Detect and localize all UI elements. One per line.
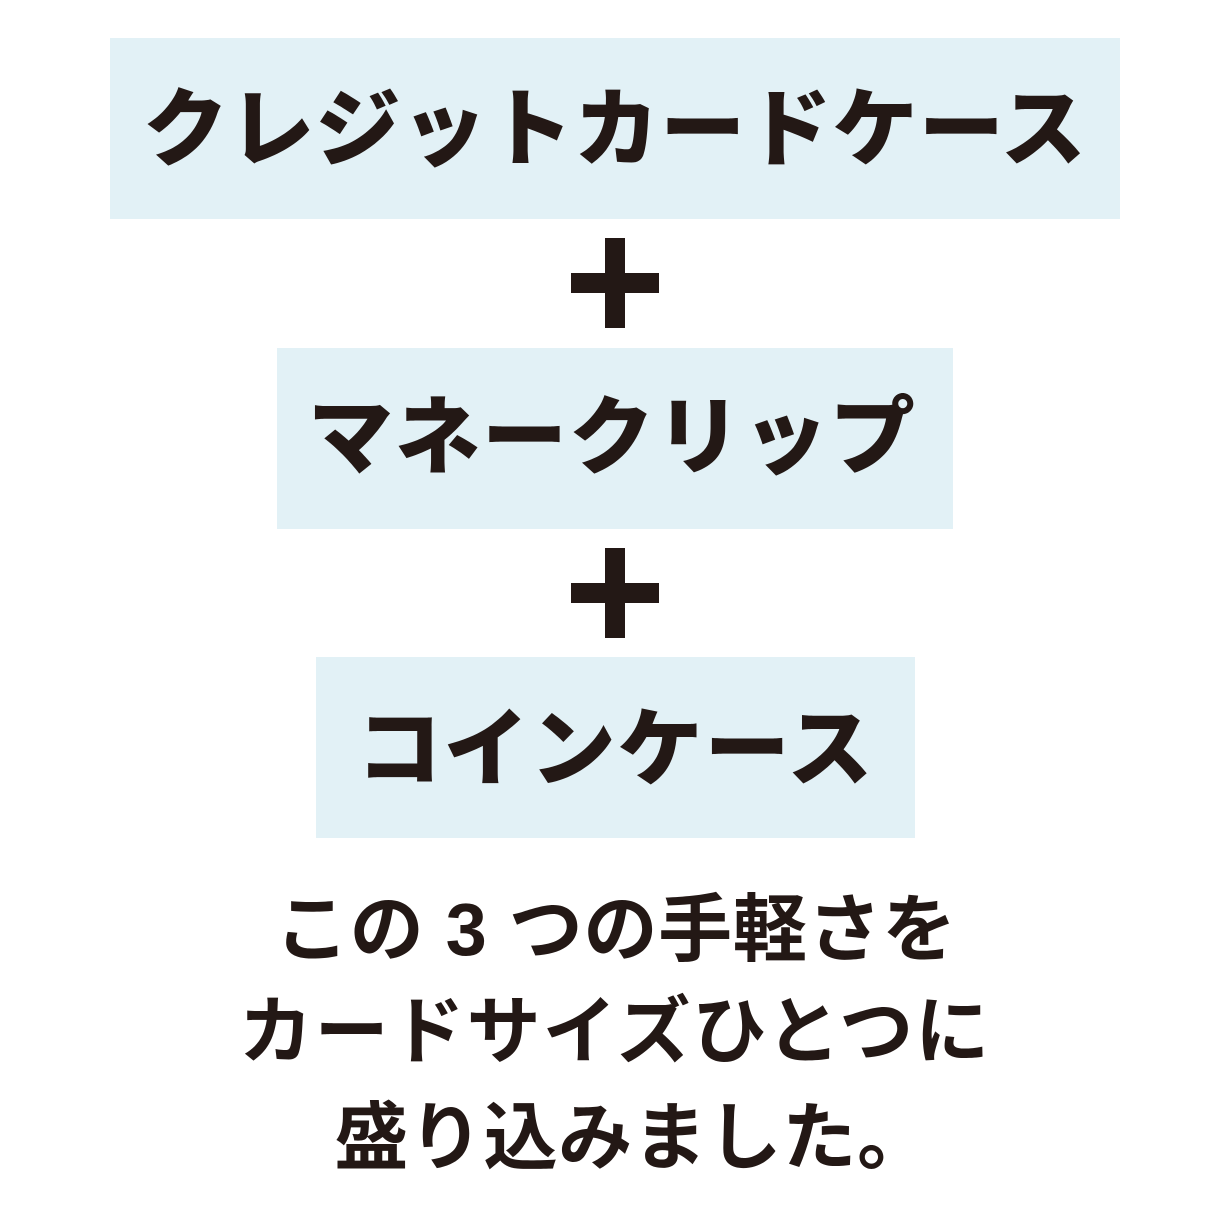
icon: plus sign 2: [571, 548, 659, 638]
panel: credit card case: [110, 38, 1120, 219]
icon: plus sign 1: [571, 238, 659, 328]
panel: coin case: [316, 657, 915, 838]
panel: money clip: マネークリップ: [308, 391, 917, 486]
text block: closing line 3: 盛り込みました。: [334, 1096, 932, 1179]
panel: coin case: コインケース: [357, 703, 874, 798]
panel: money clip: [277, 348, 953, 529]
panel: credit card case: クレジットカードケース: [143, 82, 1087, 178]
text block: closing line 2: カードサイズひとつに: [239, 990, 991, 1073]
text block: closing line 1: この 3 つの手軽さを: [275, 888, 957, 971]
